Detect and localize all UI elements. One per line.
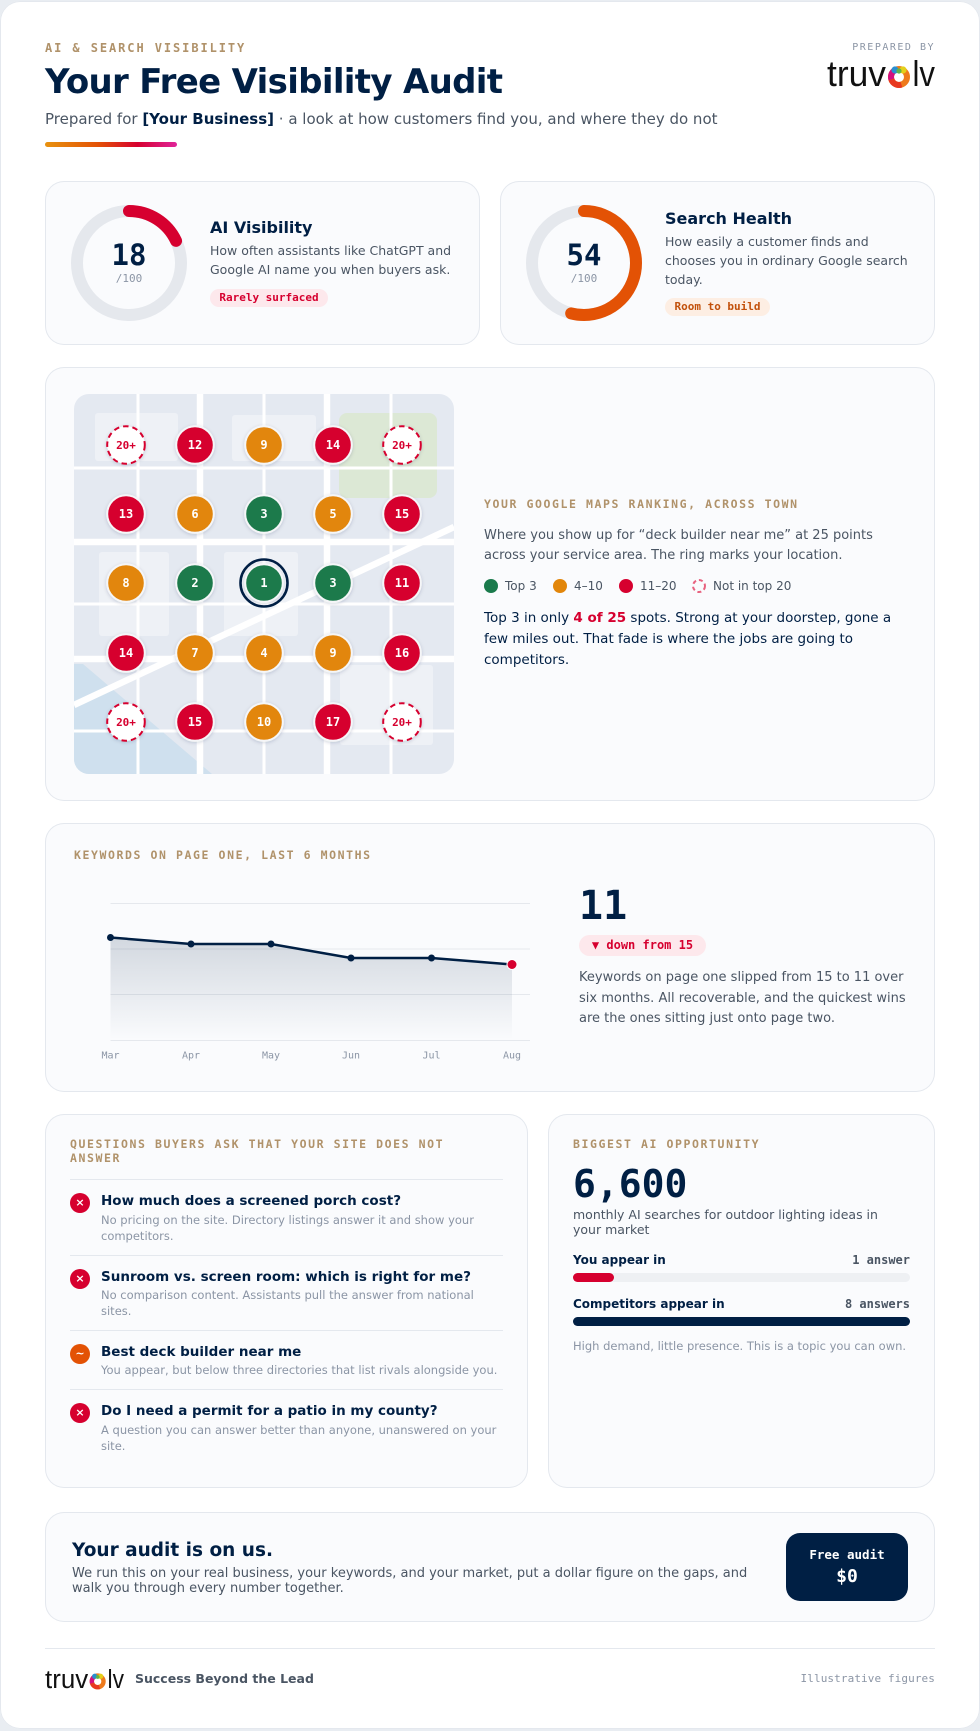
logo: truvolv — [827, 53, 935, 94]
bar label: You appear in — [573, 1253, 666, 1267]
description — [665, 234, 908, 287]
ranking dots: 11 — [395, 576, 409, 590]
ranking dots: 4 — [260, 646, 268, 660]
description — [210, 243, 451, 277]
price button — [786, 1533, 908, 1601]
description — [72, 1566, 747, 1596]
description: walk you through every number together. — [72, 1581, 344, 1596]
footer logo: truvolv: truv — [45, 1664, 89, 1694]
heading: AI Visibility — [210, 218, 312, 237]
trend pill — [579, 935, 706, 956]
line chart: May — [262, 1050, 280, 1062]
ranking dots: 8 — [122, 576, 130, 590]
section label: QUESTIONS BUYERS ASK THAT YOUR SITE DOES NOT — [70, 1137, 444, 1151]
status pill: Room to build — [674, 300, 761, 313]
icon: missing — [70, 1403, 90, 1423]
note: High demand, little presence. This is a topic you can own. — [573, 1339, 906, 1353]
explanation: sites. — [101, 1304, 131, 1318]
description — [579, 970, 906, 1026]
ranking dots: 20+ — [116, 439, 136, 452]
panel: unanswered questions — [45, 1114, 528, 1488]
ranking dots: 14 — [326, 438, 340, 452]
footer note: Illustrative figures — [801, 1672, 935, 1685]
explanation — [101, 1288, 474, 1318]
number caption — [573, 1207, 878, 1237]
status pill: Rarely surfaced — [219, 291, 319, 304]
section label: KEYWORDS ON PAGE ONE, LAST 6 MONTHS — [74, 848, 372, 862]
bar: competitors — [573, 1297, 910, 1326]
callout: Top 3 in only 4 of 25 spots. Strong at your doorstep, gone a — [484, 610, 891, 626]
button label: Free audit — [809, 1547, 885, 1562]
question 2 — [70, 1269, 474, 1318]
bar: you — [572, 1253, 910, 1282]
description: How often assistants like ChatGPT and — [210, 243, 451, 258]
bar value: 1 answer — [852, 1253, 910, 1267]
ranking dots: 15 — [188, 715, 202, 729]
section label: BIGGEST AI OPPORTUNITY — [573, 1137, 760, 1151]
explanation — [101, 1423, 496, 1453]
trend pill: ▼ down from 15 — [592, 938, 693, 952]
ranking dots: 3 — [329, 576, 337, 590]
icon: missing — [70, 1269, 90, 1289]
description: Keywords on page one slipped from 15 to 11 over — [579, 970, 903, 985]
icon: missing: × — [75, 1272, 85, 1285]
panel: Google Maps ranking — [45, 367, 935, 801]
line chart: Mar — [101, 1050, 120, 1062]
legend: Top 3 — [505, 579, 537, 593]
gauge: 18 of 100 — [71, 205, 187, 321]
section label — [70, 1137, 444, 1165]
explanation: competitors. — [101, 1229, 174, 1243]
ranking dots: 17 — [326, 715, 340, 729]
panel: biggest AI opportunity — [548, 1114, 935, 1488]
heading: Your audit is on us. — [72, 1540, 273, 1561]
ranking dots: 13 — [119, 507, 133, 521]
ranking dots: 5 — [329, 507, 337, 521]
line chart: Jul — [422, 1050, 441, 1062]
ranking dots: 20+ — [392, 716, 412, 729]
explanation: site. — [101, 1439, 125, 1453]
explanation: No pricing on the site. Directory listings answer it and show your — [101, 1213, 474, 1227]
status pill — [665, 298, 770, 316]
eyebrow: AI & SEARCH VISIBILITY — [45, 41, 246, 55]
ranking dots: 1 — [260, 576, 268, 590]
ranking dots: 10 — [257, 715, 271, 729]
question text: Best deck builder near me — [101, 1344, 301, 1360]
description: across your service area. The ring marks your location. — [484, 548, 842, 563]
callout — [484, 610, 891, 668]
description: We run this on your real business, your keywords, and your market, put a dollar figure on the gaps, and — [72, 1566, 747, 1581]
ranking dots: 9 — [260, 438, 268, 452]
ranking dots: 20+ — [392, 439, 412, 452]
ranking dots: 12 — [188, 438, 202, 452]
legend: 4–10 — [574, 579, 603, 593]
icon: partial: ~ — [75, 1347, 85, 1360]
icon: missing — [70, 1193, 90, 1213]
footer tagline: Success Beyond the Lead — [135, 1671, 314, 1686]
description: Where you show up for “deck builder near me” at 25 points — [484, 528, 873, 543]
big number: 6,600 — [573, 1162, 687, 1206]
gradient accent bar — [45, 142, 177, 147]
subtitle: Prepared for [Your Business] · a look at how customers find you, and where they do not — [45, 110, 718, 128]
question text: Sunroom vs. screen room: which is right for me? — [101, 1269, 471, 1285]
description: today. — [665, 272, 703, 287]
ranking dots: 14 — [119, 646, 133, 660]
callout: competitors. — [484, 652, 569, 668]
question 3 — [70, 1344, 497, 1377]
footer logo: truvolv: lv — [108, 1664, 125, 1694]
line chart: Jun — [342, 1050, 360, 1062]
ranking dots: 3 — [260, 507, 268, 521]
ranking dots: 6 — [191, 507, 199, 521]
button price: $0 — [836, 1566, 858, 1587]
ranking dots — [107, 426, 421, 741]
question 1 — [70, 1193, 474, 1243]
bar label: Competitors appear in — [573, 1297, 725, 1311]
explanation: A question you can answer better than anyone, unanswered on your — [101, 1423, 496, 1437]
explanation: You appear, but below three directories that list rivals alongside you. — [101, 1363, 497, 1377]
panel: AI Visibility — [45, 181, 480, 345]
score: 54 — [567, 238, 601, 272]
footer logo: truvolv — [45, 1664, 125, 1694]
number caption: your market — [573, 1222, 649, 1237]
explanation — [101, 1213, 474, 1243]
score scale: /100 — [116, 272, 142, 285]
score: 18 — [112, 238, 146, 272]
line chart — [101, 903, 530, 1062]
ranking dots: 15 — [395, 507, 409, 521]
section label: YOUR GOOGLE MAPS RANKING, ACROSS TOWN — [484, 497, 799, 511]
gauge: 54 of 100 — [526, 205, 642, 321]
ranking dots: 9 — [329, 646, 337, 660]
description: How easily a customer finds and — [665, 234, 869, 249]
panel: call to action — [45, 1512, 935, 1622]
title: Your Free Visibility Audit — [45, 62, 502, 102]
description: Google AI name you when buyers ask. — [210, 262, 450, 277]
description: six months. All recoverable, and the quickest wins — [579, 991, 906, 1006]
logo: truvolv: lv — [912, 53, 935, 94]
status pill — [210, 289, 328, 307]
description: are the ones sitting just onto page two. — [579, 1011, 835, 1026]
icon: partial — [70, 1344, 90, 1364]
question 4 — [70, 1403, 496, 1453]
callout: few miles out. That fade is where the jobs are going to — [484, 631, 853, 647]
logo: truvolv: truv — [827, 53, 886, 94]
line chart: Apr — [182, 1050, 200, 1062]
heading: Search Health — [665, 209, 792, 228]
line chart: Aug — [503, 1050, 521, 1062]
description: chooses you in ordinary Google search — [665, 253, 908, 268]
legend: Not in top 20 — [713, 579, 791, 593]
question text: Do I need a permit for a patio in my county? — [101, 1403, 438, 1419]
explanation: No comparison content. Assistants pull the answer from national — [101, 1288, 474, 1302]
description — [484, 528, 873, 563]
icon: missing: × — [75, 1406, 85, 1419]
icon: missing: × — [75, 1196, 85, 1209]
map grid — [74, 394, 454, 774]
section label: ANSWER — [70, 1151, 121, 1165]
panel: keywords on page one — [45, 823, 935, 1092]
ranking dots: 7 — [191, 646, 199, 660]
prepared by label: PREPARED BY — [852, 42, 935, 53]
big number: 11 — [579, 883, 627, 929]
ranking dots: 16 — [395, 646, 409, 660]
number caption: monthly AI searches for outdoor lighting ideas in — [573, 1207, 878, 1222]
question text: How much does a screened porch cost? — [101, 1193, 401, 1209]
score scale: /100 — [571, 272, 597, 285]
ranking dots: 20+ — [116, 716, 136, 729]
panel: Search Health — [500, 181, 935, 345]
ranking dots: 2 — [191, 576, 199, 590]
legend — [484, 579, 791, 593]
bar value: 8 answers — [845, 1297, 910, 1311]
legend: 11–20 — [640, 579, 677, 593]
